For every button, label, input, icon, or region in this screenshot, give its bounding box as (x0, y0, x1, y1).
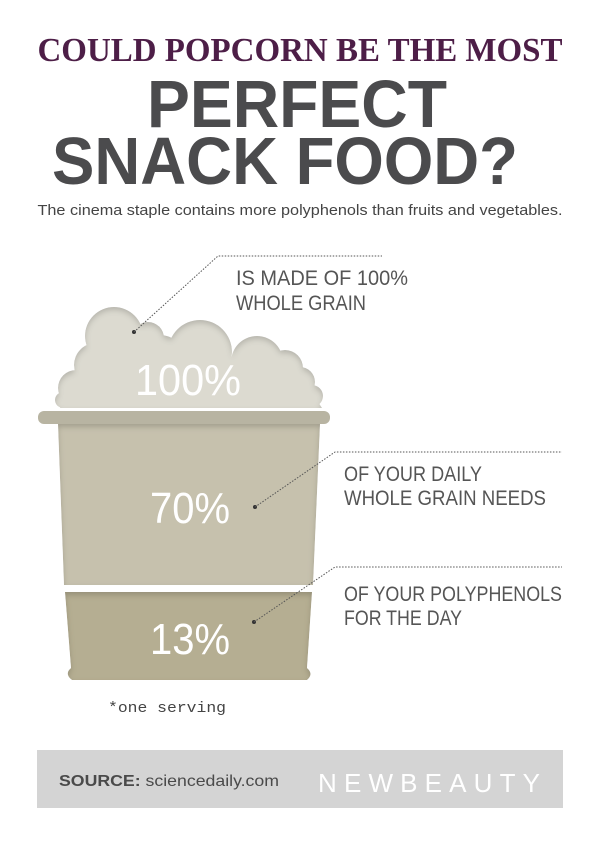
callout 1: WHOLE GRAIN (236, 292, 366, 315)
callout 2: WHOLE GRAIN NEEDS (344, 487, 546, 510)
title line 2: PERFECT (147, 67, 447, 142)
callout 1: IS MADE OF 100% (236, 267, 408, 290)
source bar (37, 750, 563, 808)
callout 3 (252, 567, 562, 630)
popcorn bucket chart (38, 307, 330, 680)
popcorn clouds (55, 307, 323, 408)
bucket upper section (58, 424, 320, 585)
callout 3: FOR THE DAY (344, 607, 462, 630)
title line 1: COULD POPCORN BE THE MOST (38, 32, 563, 69)
callout 2: OF YOUR DAILY (344, 463, 482, 486)
70%: 70% (150, 484, 230, 533)
callout 1 (132, 256, 408, 334)
title line 3: SNACK FOOD? (52, 124, 518, 199)
callout 3: OF YOUR POLYPHENOLS (344, 583, 562, 606)
source text: SOURCE: sciencedaily.com (59, 773, 279, 790)
subtitle: The cinema staple contains more polyphenols than fruits and vegetables. (38, 202, 562, 219)
bucket lower section (65, 592, 312, 680)
rim (38, 411, 330, 424)
footnote: *one serving (108, 700, 226, 717)
callout 2 (253, 452, 562, 510)
logo: NEWBEAUTY (318, 768, 540, 798)
100%: 100% (135, 356, 241, 405)
13%: 13% (150, 615, 230, 664)
